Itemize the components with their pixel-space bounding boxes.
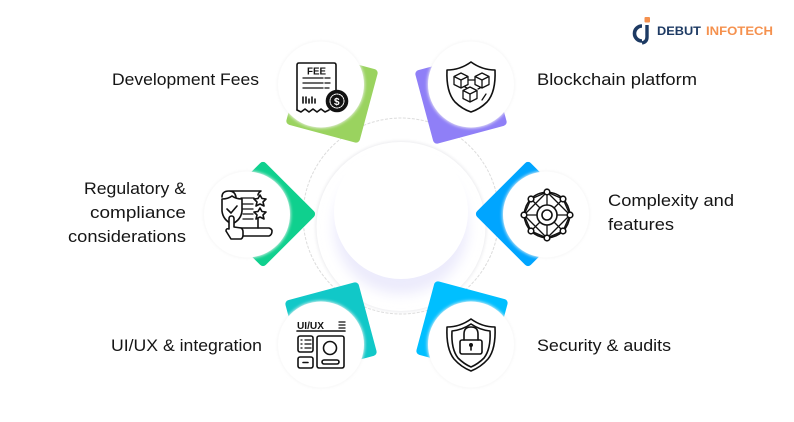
green square bbox=[285, 50, 379, 144]
blue diamond bbox=[474, 160, 582, 268]
logo: Debut Infotech bbox=[635, 17, 773, 43]
card: Blockchain platform bbox=[414, 41, 514, 145]
label: Regulatory and compliance considerations bbox=[68, 180, 186, 246]
icon: UI/UX screens bbox=[297, 322, 345, 368]
white circle bbox=[278, 301, 364, 388]
card: Security and audits bbox=[415, 280, 514, 388]
card: Development Fees: $ bbox=[334, 97, 340, 108]
label: Complexity and features: features bbox=[608, 216, 674, 234]
logo: Debut Infotech: INFOTECH bbox=[706, 26, 773, 38]
icon: padlock shield bbox=[447, 319, 495, 371]
icon: compliance scroll bbox=[222, 191, 272, 239]
central circle bbox=[303, 118, 499, 314]
label: UI/UX and integration: UI/UX & integration bbox=[111, 337, 262, 355]
label: Development Fees: Development Fees bbox=[112, 71, 259, 89]
label: Regulatory and compliance considerations: considerations bbox=[68, 228, 186, 246]
label: Complexity and features: Complexity and bbox=[608, 192, 734, 210]
emerald diamond bbox=[209, 160, 317, 268]
label: Regulatory and compliance considerations: compliance bbox=[90, 204, 186, 222]
logo: Debut Infotech: DEBUT bbox=[657, 26, 701, 38]
white circle bbox=[428, 301, 514, 388]
label: Blockchain platform: Blockchain platform bbox=[537, 71, 697, 89]
white circle bbox=[502, 171, 590, 258]
label: Security and audits: Security & audits bbox=[537, 337, 671, 355]
label: Regulatory and compliance considerations: Regulatory & bbox=[84, 180, 186, 198]
card: Development Fees bbox=[278, 41, 379, 144]
icon: network gear bbox=[521, 189, 573, 241]
purple square bbox=[414, 51, 508, 145]
logo mark bbox=[635, 17, 650, 43]
sky square bbox=[415, 280, 509, 374]
white circle bbox=[428, 41, 514, 128]
card: Development Fees: FEE bbox=[307, 66, 326, 78]
card: Complexity and features bbox=[474, 160, 590, 268]
white circle bbox=[278, 41, 364, 128]
white circle bbox=[204, 171, 290, 258]
teal square bbox=[284, 281, 378, 375]
card: UI/UX and integration bbox=[278, 281, 378, 388]
card: UI/UX and integration: UI/UX bbox=[297, 321, 324, 332]
icon: blockchain shield bbox=[447, 62, 495, 112]
label: Complexity and features bbox=[608, 192, 734, 234]
card: Regulatory and compliance bbox=[204, 160, 317, 268]
icon: fee receipt bbox=[297, 63, 348, 112]
